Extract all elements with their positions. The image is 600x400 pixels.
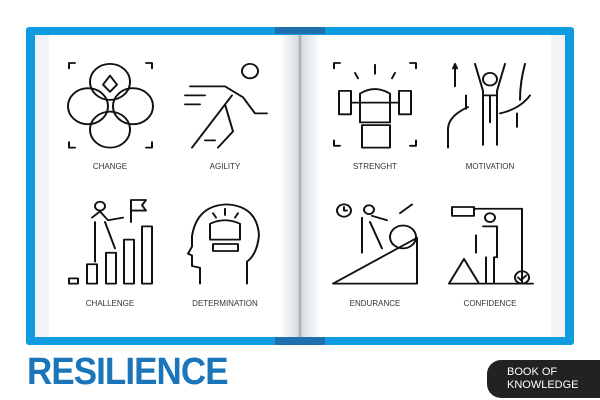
labels: CHALLENGE — [86, 299, 134, 308]
row 1 icons — [68, 63, 530, 148]
labels: CHANGE — [93, 162, 127, 171]
icon: strength — [334, 63, 416, 148]
title: RESILIENCE — [27, 351, 228, 393]
row 2 icons — [69, 200, 533, 284]
labels: AGILITY — [210, 162, 241, 171]
labels: CONFIDENCE — [464, 299, 516, 308]
labels: MOTIVATION — [466, 162, 515, 171]
book cover — [26, 27, 574, 345]
labels: STRENGHT — [353, 162, 397, 171]
badge — [487, 360, 600, 398]
icon: motivation — [448, 64, 530, 148]
icon: challenge — [69, 200, 152, 284]
icon: confidence — [449, 207, 533, 284]
icon: endurance — [333, 204, 417, 284]
icon: agility — [185, 64, 267, 148]
labels — [86, 162, 516, 308]
badge: KNOWLEDGE — [507, 379, 579, 391]
badge: BOOK OF — [507, 366, 557, 378]
labels: ENDURANCE — [350, 299, 400, 308]
labels: DETERMINATION — [192, 299, 258, 308]
icon: change — [68, 63, 153, 148]
icon: determination — [188, 204, 259, 284]
pages — [35, 35, 565, 337]
